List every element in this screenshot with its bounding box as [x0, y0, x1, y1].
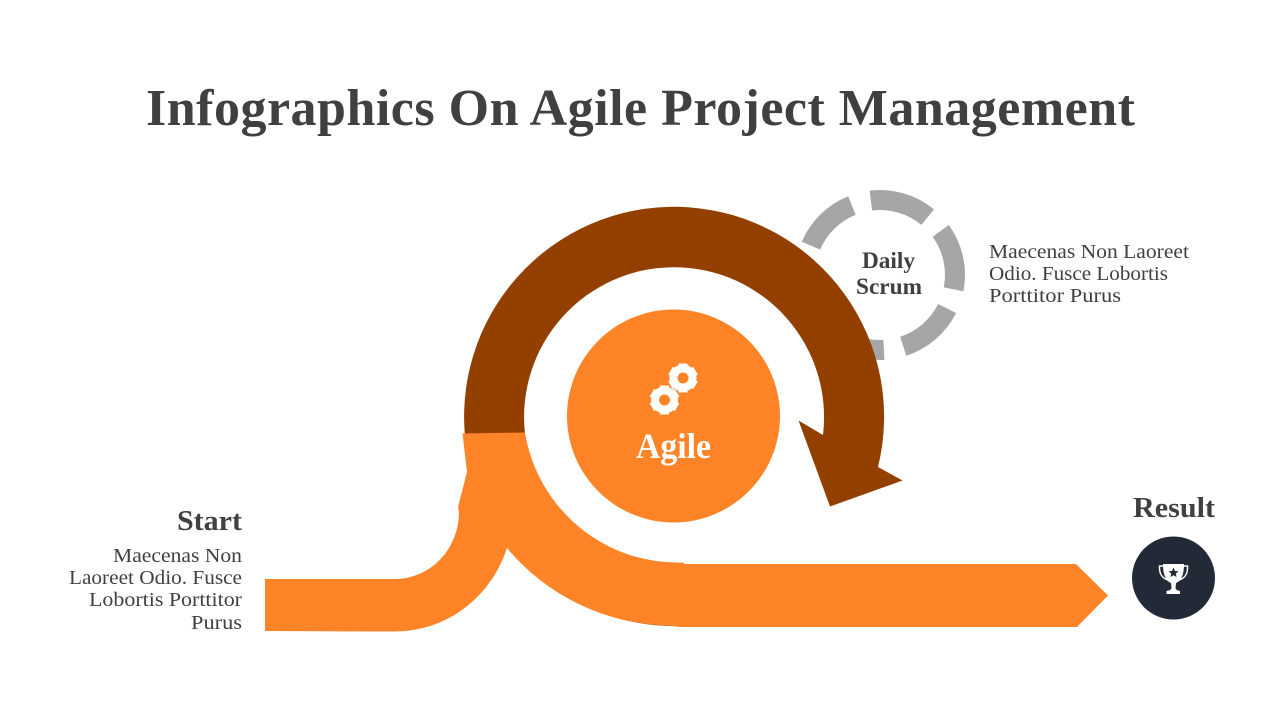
result heading: Result	[1133, 493, 1216, 524]
result circle	[1132, 536, 1215, 620]
title: Infographics On Agile Project Management	[146, 80, 1136, 137]
start description: Lobortis Porttitor	[89, 589, 242, 611]
icon: gears	[650, 364, 698, 414]
daily scrum dashed ring	[811, 200, 955, 350]
daily scrum description: Porttitor Purus	[989, 285, 1121, 307]
start heading: Start	[177, 506, 243, 537]
start description: Purus	[191, 612, 242, 634]
daily scrum description	[989, 241, 1189, 307]
start description	[69, 545, 242, 634]
daily scrum label	[856, 248, 922, 299]
orange flow arrow	[265, 432, 1108, 632]
start description: Laoreet Odio. Fusce	[69, 567, 242, 589]
agile label: Agile	[636, 426, 711, 466]
start description: Maecenas Non	[113, 545, 242, 567]
daily scrum description: Maecenas Non Laoreet	[989, 241, 1189, 263]
agile circle	[567, 310, 780, 522]
daily scrum description: Odio. Fusce Lobortis	[989, 263, 1168, 285]
daily scrum label: Scrum	[856, 274, 922, 299]
brown circular arrow	[464, 207, 902, 626]
daily scrum label: Daily	[862, 248, 916, 273]
icon: trophy	[1159, 564, 1188, 594]
